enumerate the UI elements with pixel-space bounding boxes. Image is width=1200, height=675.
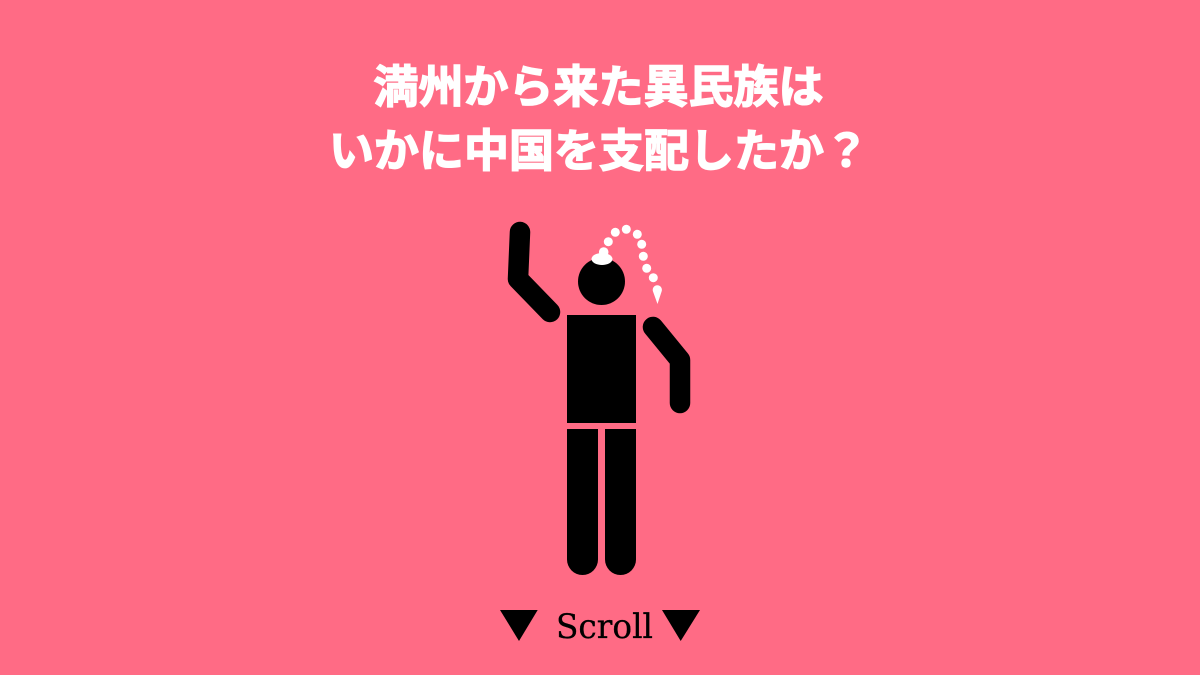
left arrow <box>500 610 538 641</box>
lowered arm <box>653 327 680 403</box>
torso <box>567 315 636 423</box>
head <box>578 258 625 305</box>
title: 満州から来た異民族は <box>373 62 824 112</box>
right arrow <box>662 610 700 641</box>
figure: man with queue hairstyle <box>518 225 680 575</box>
title: いかに中国を支配したか？ <box>329 126 869 176</box>
right leg <box>605 429 636 575</box>
scroll label: Scroll <box>556 607 653 647</box>
queue braid <box>592 225 662 304</box>
raised arm <box>518 232 550 312</box>
left leg <box>567 429 598 575</box>
title <box>329 62 869 176</box>
scroll indicator <box>500 607 700 647</box>
